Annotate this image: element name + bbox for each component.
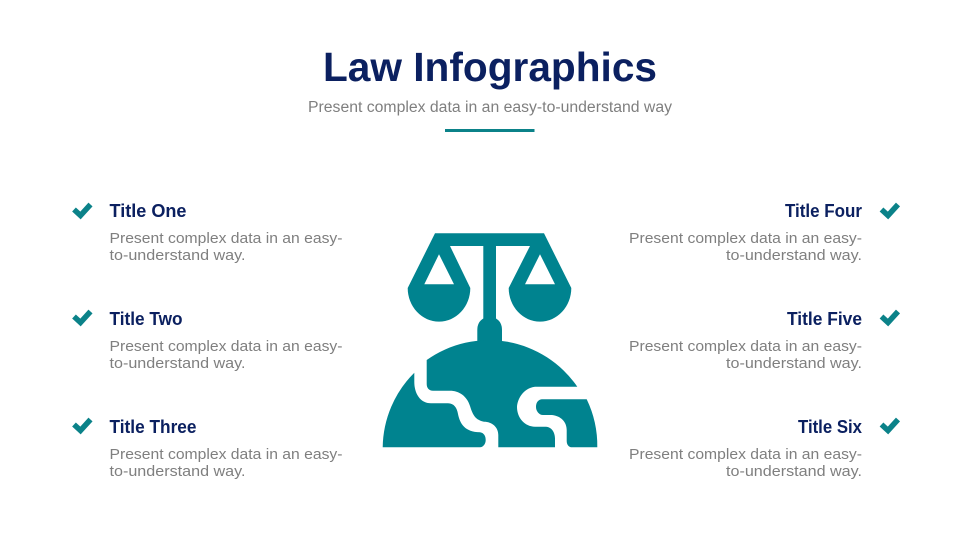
heading: Title Two: [110, 308, 182, 329]
item: Title Three: to-understand way.: [110, 463, 246, 480]
icon: check: [882, 204, 898, 216]
subtitle: Present complex data in an easy-to-understand way: [308, 99, 672, 116]
icon: scales: [408, 233, 571, 345]
item: Title Four: [629, 200, 898, 264]
icon: check: [882, 420, 898, 430]
body text: Present complex data in an easy-: [110, 338, 342, 355]
icon: globe: [383, 340, 597, 447]
body text: Present complex data in an easy-: [629, 338, 862, 355]
item: Title Six: [629, 416, 898, 480]
icon: check: [74, 204, 90, 216]
item: Title Two: [74, 308, 342, 372]
icon: check: [882, 312, 898, 322]
item: Title Six: to-understand way.: [726, 463, 862, 480]
item: Title One: to-understand way.: [110, 247, 246, 264]
icon: check: [74, 420, 90, 430]
item: Title One: [74, 200, 342, 264]
body text: Present complex data in an easy-: [110, 230, 342, 247]
item: Title Two: to-understand way.: [110, 355, 246, 372]
heading: Title Four: [785, 200, 862, 221]
item: Title Five: to-understand way.: [726, 355, 862, 372]
heading: Title Three: [110, 416, 196, 437]
heading: Title Five: [787, 308, 862, 329]
icon: check: [74, 312, 90, 322]
item: Title Five: [629, 308, 898, 372]
title underline: [445, 129, 534, 132]
item: Title Four: to-understand way.: [726, 247, 862, 264]
heading: Title Six: [798, 416, 863, 437]
item: Title Three: [74, 416, 342, 480]
title: Law Infographics: [323, 44, 657, 90]
body text: Present complex data in an easy-: [629, 446, 862, 463]
heading: Title One: [110, 200, 186, 221]
body text: Present complex data in an easy-: [629, 230, 862, 247]
central icon: scales of justice on globe: [383, 233, 597, 447]
body text: Present complex data in an easy-: [110, 446, 342, 463]
